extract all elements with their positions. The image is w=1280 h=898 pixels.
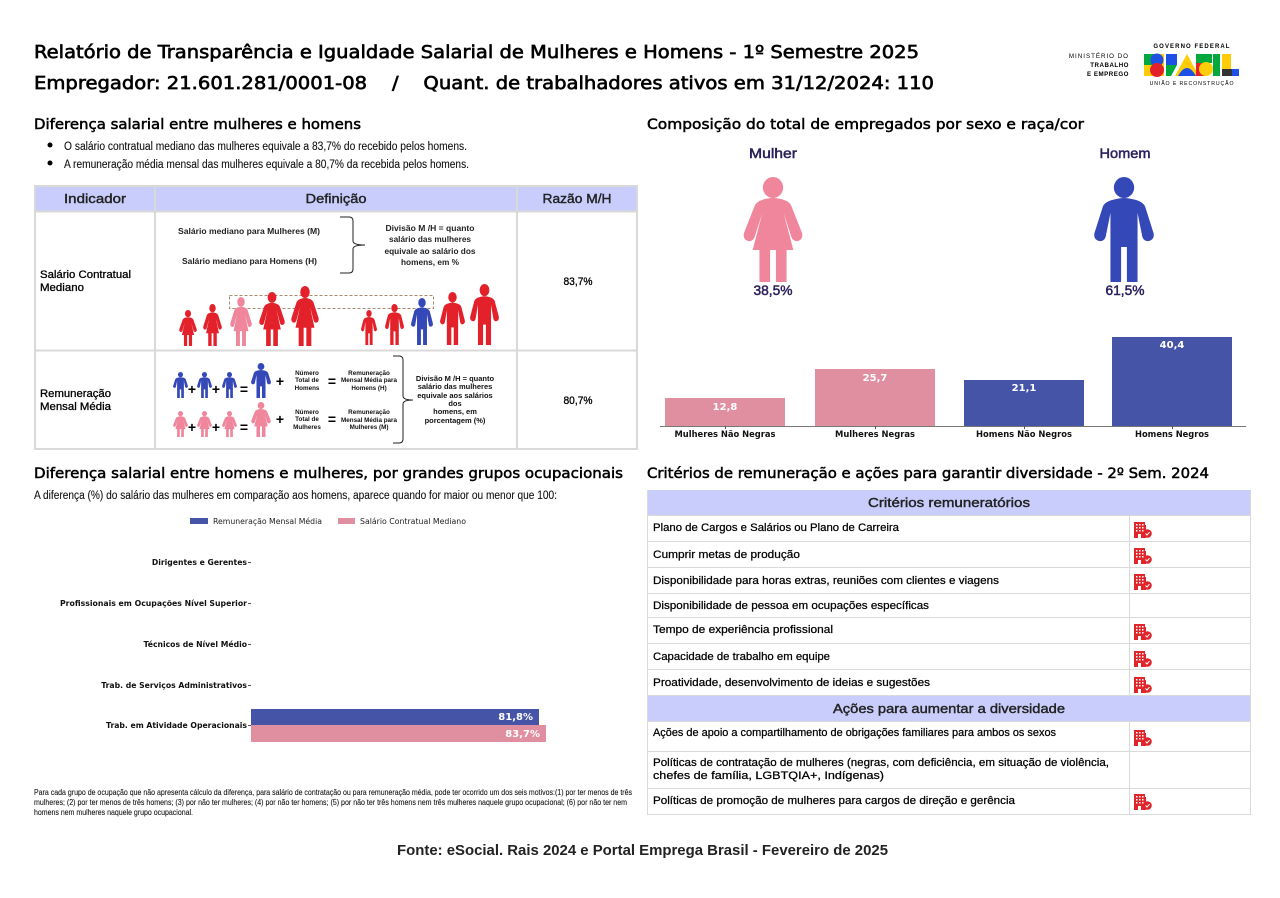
table: critérios e ações: Políticas de promoção de mulheres para cargos de direção e gerência [653, 795, 1016, 807]
panel: composição por sexo e raça/cor [647, 117, 1246, 440]
pictogram: mulher: 38,5% [754, 282, 792, 298]
bullet text block: O salário contratual mediano das mulheres equivale a 83,7% do recebido pelos homens. [64, 141, 467, 153]
pictogram: mulher: Mulher [749, 145, 797, 161]
definition: salário mediano: equivale ao salário dos [384, 246, 476, 256]
indicator table: Indicador [64, 191, 127, 206]
bar chart: composição: 25,7 [863, 373, 887, 384]
definition: remuneração média: dos [448, 399, 462, 408]
definition: remuneração média: Total de [295, 416, 319, 423]
table: critérios e ações: Ações de apoio a compartilhamento de obrigações familiares para ambos os sexos [653, 727, 1056, 739]
legend: Remuneração Mensal Média [213, 516, 322, 526]
indicator table: Mensal Média [40, 401, 112, 413]
bar chart: composição: 21,1 [1012, 383, 1036, 394]
definition: remuneração média: Mensal Média para [341, 377, 397, 384]
title [34, 42, 934, 94]
definition: remuneração média: Total de [295, 377, 319, 384]
table: critérios e ações: Cumprir metas de produção [653, 549, 800, 561]
table: critérios e ações [647, 490, 1251, 814]
intro text: A diferença (%) do salário das mulheres em comparação aos homens, aparece quando for maior ou menor que 100: [34, 490, 557, 502]
definition: remuneração média: Número [295, 370, 319, 377]
table: critérios e ações: Tempo de experiência profissional [653, 624, 833, 636]
title: Empregador: 21.601.281/0001-08 / Quant. de trabalhadores ativos em 31/12/2024: 110 [34, 73, 934, 94]
pictogram: homem: 61,5% [1106, 282, 1144, 298]
definition: remuneração média: equivale aos salários [417, 391, 493, 400]
heading: composição: Composição do total de empregados por sexo e raça/cor [647, 117, 1084, 133]
indicator table [34, 185, 637, 449]
definition: remuneração média: + [188, 419, 196, 435]
definition: remuneração média: = [240, 381, 248, 397]
heading: critérios: Critérios de remuneração e ações para garantir diversidade - 2º Sem. 2024 [647, 466, 1209, 482]
definition: salário mediano: homens, em % [401, 257, 459, 267]
panel: diferença salarial entre mulheres e homens [34, 117, 637, 449]
horizontal bar chart: Profissionais em Ocupações Nível Superior [60, 599, 247, 608]
heading: diferença salarial: Diferença salarial entre mulheres e homens [34, 117, 361, 133]
definition: remuneração média: Remuneração [348, 409, 390, 416]
indicator table: 83,7% [564, 276, 593, 288]
table: critérios e ações: chefes de família, LGBTQIA+, Indígenas) [653, 770, 884, 782]
logo: ministério e governo federal [1069, 44, 1239, 87]
indicator table: Razão M/H [542, 191, 612, 206]
definition: remuneração média [173, 356, 494, 443]
indicator table: Remuneração [40, 388, 111, 400]
definition: remuneração média: Número [295, 409, 319, 416]
horizontal bar chart: Dirigentes e Gerentes [152, 558, 247, 567]
horizontal bar chart [60, 558, 546, 742]
definition: remuneração média: Remuneração [348, 370, 390, 377]
indicator table: Mediano [40, 282, 84, 294]
panel: diferença por grupos ocupacionais [34, 466, 632, 817]
pictogram: homem: Homem [1100, 145, 1150, 161]
bar chart: composição: 40,4 [1160, 340, 1184, 351]
definition: salário mediano: Divisão M /H = quanto [386, 223, 474, 233]
definition: remuneração média: = [240, 419, 248, 435]
definition: remuneração média: homens, em [433, 407, 477, 416]
table: critérios e ações: Proatividade, desenvolvimento de ideias e sugestões [653, 677, 931, 689]
definition: remuneração média: Mulheres [293, 424, 321, 431]
definition: remuneração média: Mensal Média para [341, 417, 397, 424]
panel: critérios de remuneração e ações [647, 466, 1251, 814]
bar chart: composição: Mulheres Não Negras [674, 430, 776, 440]
indicator table: 80,7% [564, 395, 593, 407]
bar chart: composição: Homens Não Negros [976, 430, 1072, 440]
horizontal bar chart: Trab. de Serviços Administrativos [101, 681, 247, 690]
definition: remuneração média: + [212, 419, 220, 435]
definition: remuneração média: + [276, 411, 284, 427]
definition: remuneração média: Divisão M /H = quanto [416, 374, 494, 383]
table: critérios e ações: Ações para aumentar a diversidade [833, 701, 1065, 716]
logo: ministério e governo federal: TRABALHO [1090, 62, 1129, 69]
source footer: Fonte: eSocial. Rais 2024 e Portal Emprega Brasil - Fevereiro de 2025 [397, 843, 888, 859]
footnote: homens nem mulheres naquele grupo ocupacional. [34, 808, 193, 817]
footnote: mulheres; (2) por ter menos de três homens; (3) por não ter mulheres; (4) por não ter homens; (5) por não ter três homens nem três mulheres naquele grupo ocupacional; (6) por não ter nem [34, 798, 627, 807]
definition: salário mediano: Salário mediano para Homens (H) [182, 256, 317, 266]
icons: empresa adota critério [1134, 522, 1152, 810]
bullet text block: A remuneração média mensal das mulheres equivale a 80,7% da recebida pelos homens. [64, 159, 469, 171]
table: critérios e ações: Plano de Cargos e Salários ou Plano de Carreira [653, 522, 900, 534]
horizontal bar chart: 81,8% [498, 712, 533, 723]
pictogram: mulher [744, 145, 802, 298]
logo: ministério e governo federal: E EMPREGO [1087, 71, 1129, 78]
horizontal bar chart: 83,7% [505, 729, 540, 740]
table: critérios e ações: Disponibilidade para horas extras, reuniões com clientes e viagens [653, 575, 1000, 587]
heading: grupos ocupacionais: Diferença salarial entre homens e mulheres, por grandes grupos ocupacionais [34, 466, 623, 482]
legend [190, 516, 466, 526]
bar chart: composição: 12,8 [713, 402, 737, 413]
definition: remuneração média: Mulheres (M) [350, 424, 388, 431]
bar chart: composição [660, 337, 1246, 440]
logo: ministério e governo federal: MINISTÉRIO DO [1069, 53, 1129, 60]
horizontal bar chart: Técnicos de Nível Médio [144, 640, 247, 649]
table: critérios e ações: Disponibilidade de pessoa em ocupações específicas [653, 600, 930, 612]
legend: Salário Contratual Mediano [360, 517, 466, 526]
logo: ministério e governo federal: UNIÃO E RECONSTRUÇÃO [1150, 80, 1234, 87]
title: Relatório de Transparência e Igualdade Salarial de Mulheres e Homens - 1º Semestre 2025 [34, 42, 919, 63]
bar chart: composição: Homens Negros [1135, 430, 1209, 440]
definition: salário mediano [178, 217, 476, 273]
definition: remuneração média: + [212, 381, 220, 397]
definition: salário mediano: Salário mediano para Mulheres (M) [178, 226, 320, 236]
definition: remuneração média: = [328, 411, 336, 427]
bar chart: composição: Mulheres Negras [835, 430, 915, 440]
indicator table: Definição [306, 191, 366, 206]
table: critérios e ações: Capacidade de trabalho em equipe [653, 651, 830, 663]
table: critérios e ações: Políticas de contratação de mulheres (negras, com deficiência, em situação de violência, [653, 757, 1109, 769]
definition: salário mediano: salário das mulheres [389, 234, 471, 244]
definition: remuneração média: salário das mulheres [418, 382, 492, 391]
footnote: Para cada grupo de ocupação que não apresenta cálculo da diferença, para salário de contratação ou para remuneração média, pode ter ocorrido um dos seis motivos:(1) por ter menos de três [34, 788, 632, 797]
definition: remuneração média: Homens [295, 385, 320, 392]
icons: people ordered by salary [179, 284, 499, 346]
table: critérios e ações: Critérios remuneratórios [868, 495, 1031, 510]
definition: remuneração média: + [276, 373, 284, 389]
pictogram: homem [1094, 145, 1154, 298]
definition: remuneração média: + [188, 381, 196, 397]
footnote [34, 788, 632, 817]
definition: remuneração média: porcentagem (%) [425, 416, 486, 425]
logo: ministério e governo federal: GOVERNO FEDERAL [1153, 44, 1231, 50]
definition: remuneração média: Homens (H) [351, 385, 387, 392]
bullet text block [48, 141, 469, 171]
indicator table: Salário Contratual [40, 269, 131, 281]
horizontal bar chart: Trab. em Atividade Operacionais [106, 721, 247, 730]
definition: remuneração média: = [328, 373, 336, 389]
